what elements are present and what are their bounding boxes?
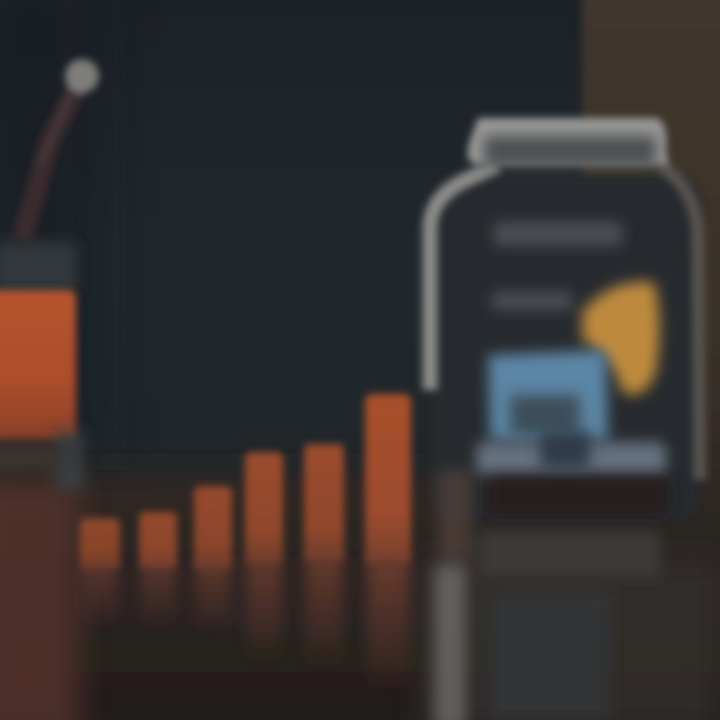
icon: drink glass with straw [0,59,99,490]
jar outline [430,165,700,480]
jar label text blur [492,222,622,310]
table surface [0,472,720,720]
jar lid [468,118,668,165]
bar reflections [82,556,409,693]
orange fruit shape [582,282,660,394]
juice [0,290,76,440]
background: brown panel right [582,0,720,550]
icon: glass jar with label [430,118,700,720]
glass rim [0,242,77,292]
jar body [432,175,700,520]
blue label [488,350,608,440]
jar reflection [434,470,660,720]
dark jar contents [486,476,670,516]
straw [22,59,99,240]
glass base [54,430,84,490]
pale label base [476,442,666,476]
bar chart: orange ascending bars [80,394,411,693]
